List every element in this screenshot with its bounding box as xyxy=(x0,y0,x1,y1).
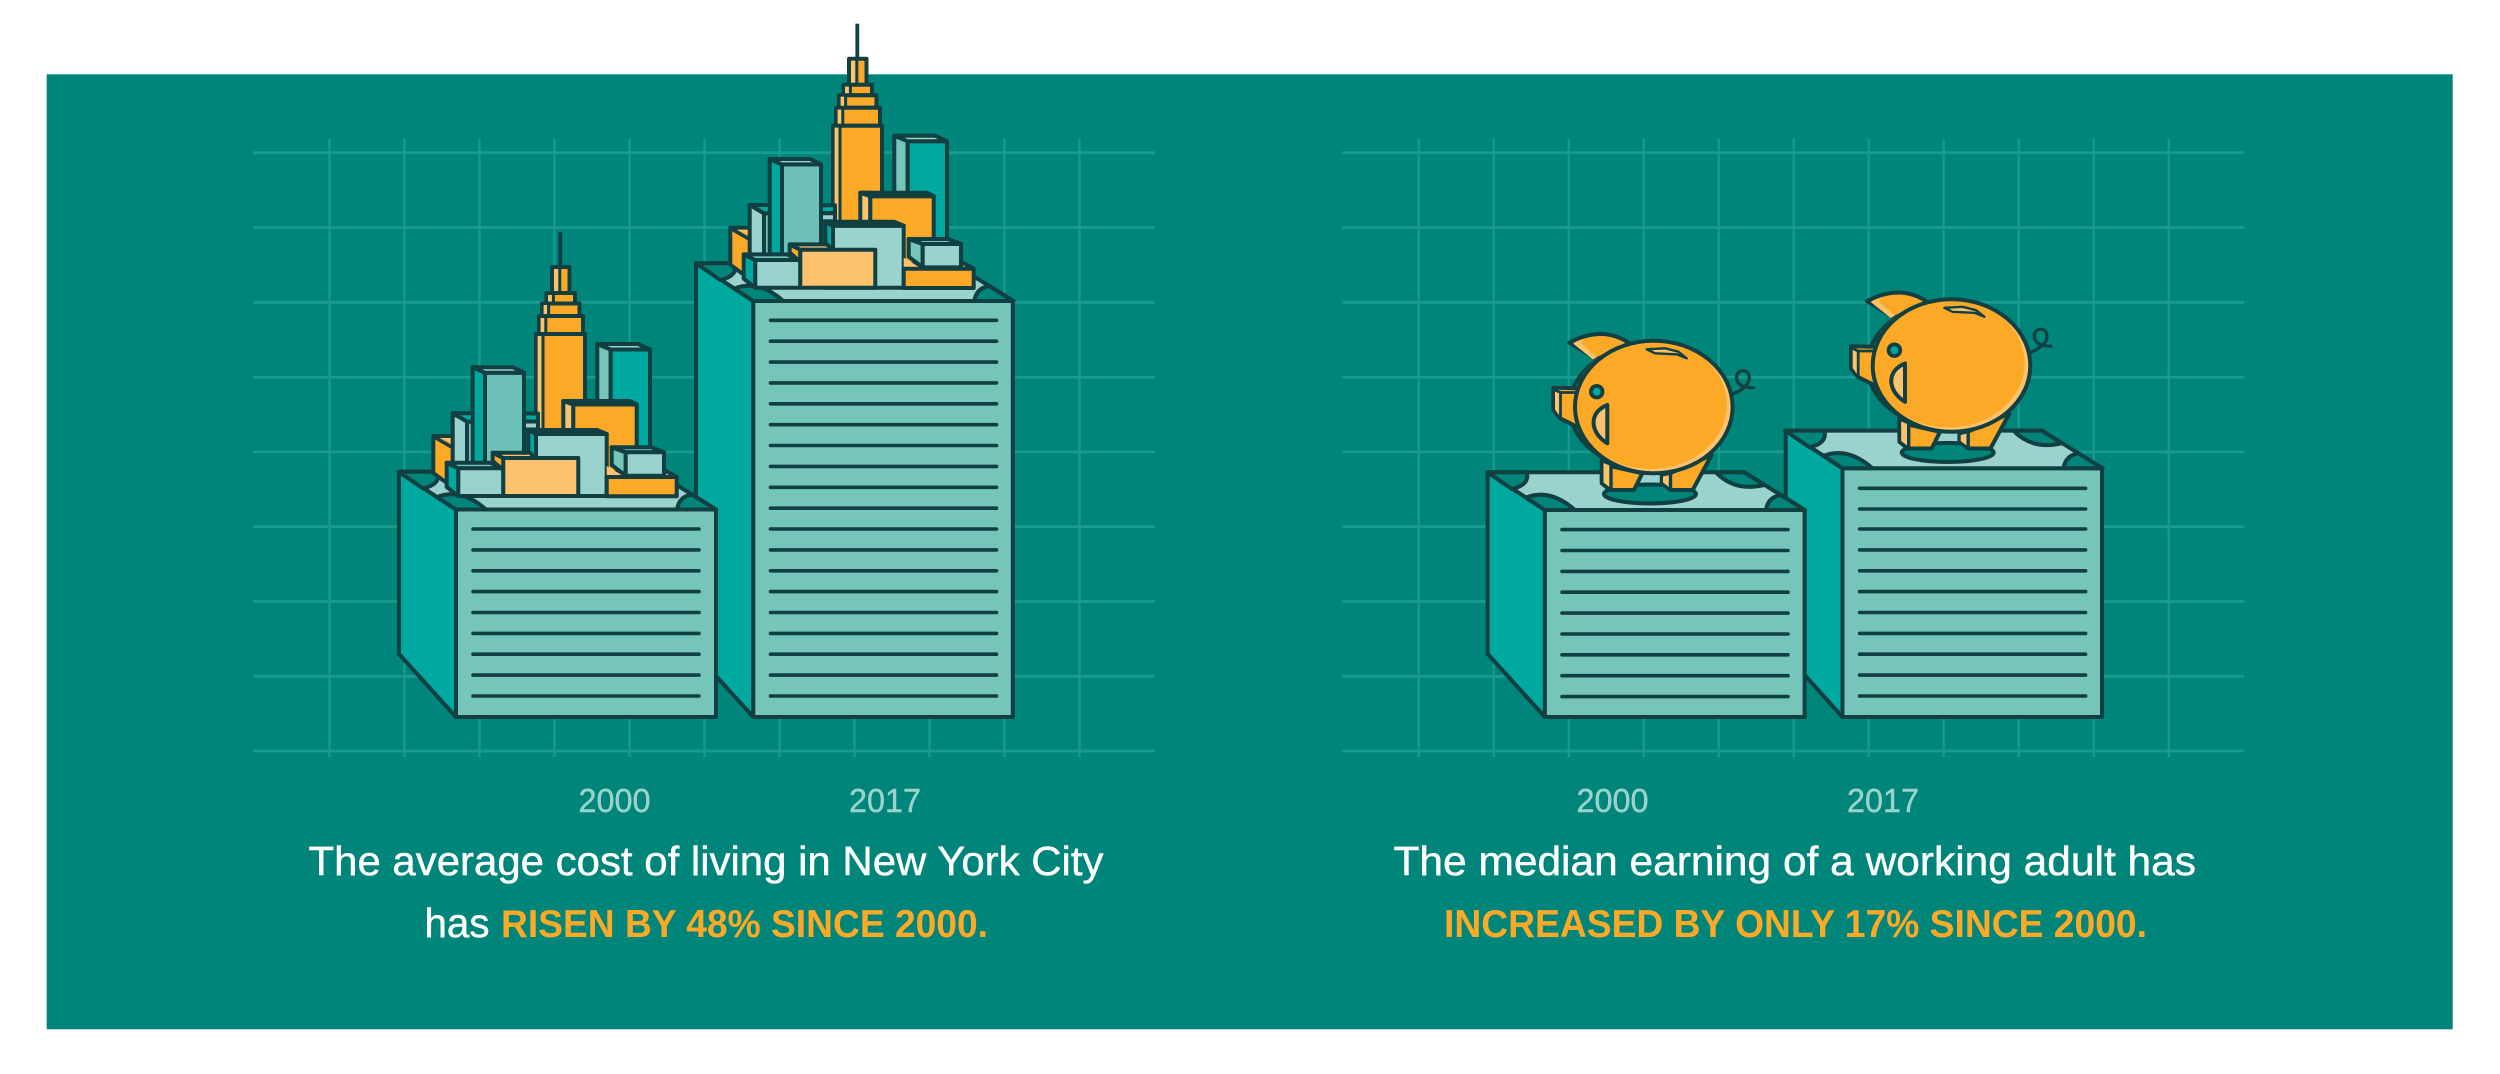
caption: median earning: INCREASED BY ONLY 17% SINCE 2000. xyxy=(1444,903,2147,946)
icon: 2017 piggy bank xyxy=(1851,292,2051,462)
axis label: left 2000: 2000 xyxy=(578,782,650,819)
grid: right chart xyxy=(1342,139,2244,757)
caption: median earning xyxy=(1394,838,2196,946)
grid: left chart xyxy=(253,139,1155,757)
caption: cost of living: RISEN BY 48% SINCE 2000. xyxy=(501,903,988,946)
axis label: left 2017: 2017 xyxy=(849,782,921,819)
axis label: right 2017: 2017 xyxy=(1847,782,1919,819)
right chart: median earning xyxy=(1488,292,2102,717)
illustration: 2000 city skyline xyxy=(433,232,677,496)
bar: 2017 earning xyxy=(1785,431,2102,717)
caption: cost of living xyxy=(308,838,1104,946)
icon: 2000 piggy bank xyxy=(1553,334,1753,504)
bar: 2017 cost of living xyxy=(696,263,1013,717)
left chart: cost of living xyxy=(399,24,1013,717)
illustration: 2017 city skyline xyxy=(730,24,974,288)
caption: cost of living: The average cost of living in New York City xyxy=(308,838,1104,884)
caption: cost of living: has xyxy=(424,900,490,946)
caption: median earning: The median earning of a working adult has xyxy=(1394,838,2196,884)
bar: 2000 cost of living xyxy=(399,472,716,717)
bar: 2000 earning xyxy=(1488,472,1805,717)
axis label: right 2000: 2000 xyxy=(1576,782,1648,819)
